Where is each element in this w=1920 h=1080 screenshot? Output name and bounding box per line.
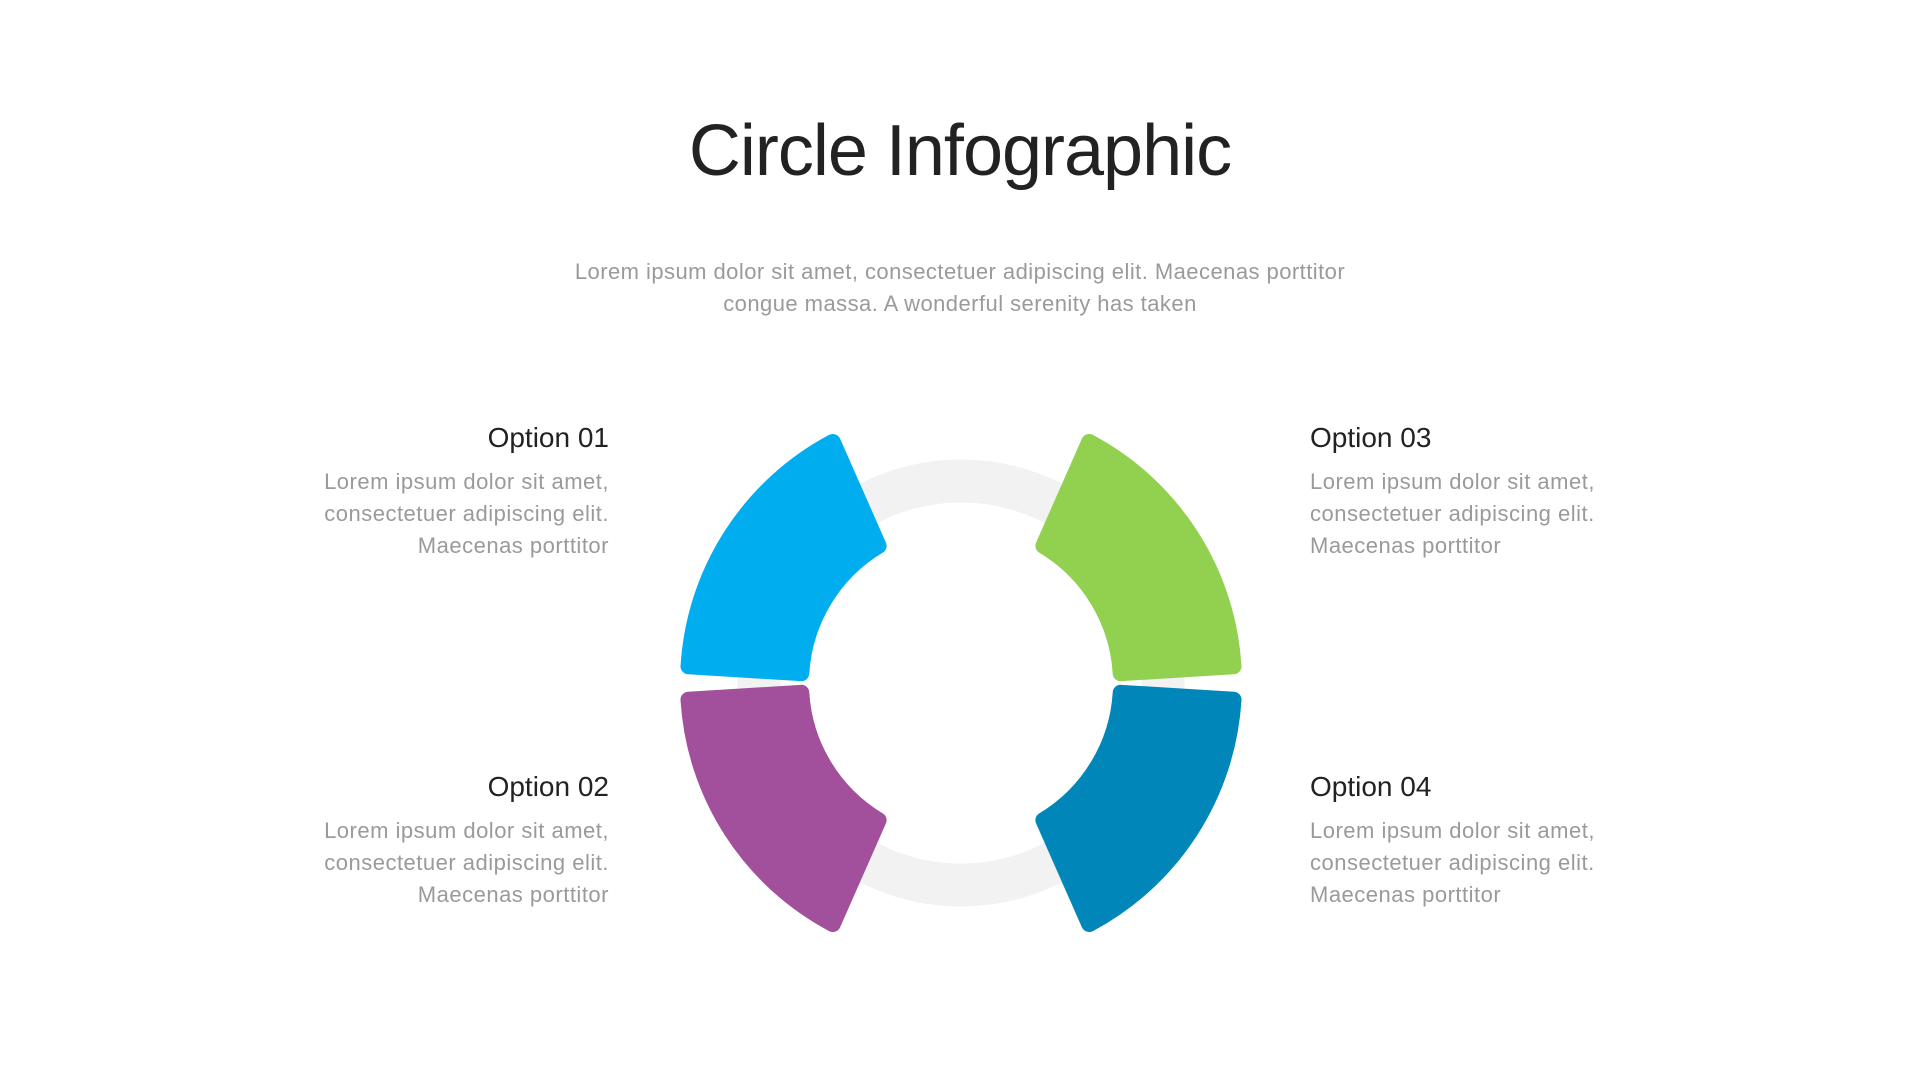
option 04: consectetuer adipiscing elit. [1310, 850, 1595, 875]
segment: option 01 blue [688, 442, 879, 673]
option 03: Maecenas porttitor [1310, 533, 1501, 558]
option 01: consectetuer adipiscing elit. [324, 501, 609, 526]
subtitle: Lorem ipsum dolor sit amet, consectetuer adipiscing elit. Maecenas porttitor [575, 259, 1345, 284]
option 04 [1310, 771, 1595, 907]
option 02: Lorem ipsum dolor sit amet, [324, 818, 609, 843]
option 01 [324, 422, 609, 558]
option 04: Lorem ipsum dolor sit amet, [1310, 818, 1595, 843]
segment: option 02 purple [688, 693, 879, 924]
subtitle [575, 259, 1345, 316]
option 02: Maecenas porttitor [418, 882, 609, 907]
option 02: consectetuer adipiscing elit. [324, 850, 609, 875]
option 03: Lorem ipsum dolor sit amet, [1310, 469, 1595, 494]
option 04: Option 04 [1310, 771, 1431, 802]
title: Circle Infographic [689, 111, 1231, 191]
option 02 [324, 771, 609, 907]
background ring [759, 481, 1163, 885]
option 03: consectetuer adipiscing elit. [1310, 501, 1595, 526]
option 01: Option 01 [488, 422, 609, 453]
option 01: Maecenas porttitor [418, 533, 609, 558]
option 02: Option 02 [488, 771, 609, 802]
segment: option 03 green [1043, 442, 1234, 673]
option 03: Option 03 [1310, 422, 1431, 453]
option 03 [1310, 422, 1595, 558]
segment: option 04 teal [1043, 693, 1234, 924]
subtitle: congue massa. A wonderful serenity has taken [723, 291, 1197, 316]
option 01: Lorem ipsum dolor sit amet, [324, 469, 609, 494]
option 04: Maecenas porttitor [1310, 882, 1501, 907]
